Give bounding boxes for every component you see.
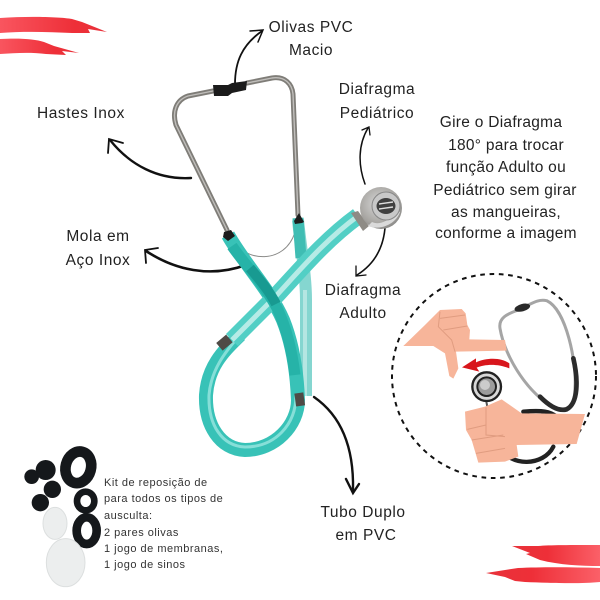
spring bbox=[233, 232, 295, 257]
label: Diafragma Adulto: Adulto bbox=[339, 305, 387, 322]
label: Olivas PVC Macio: Macio bbox=[289, 42, 333, 59]
olive yoke bbox=[213, 81, 247, 96]
clear membranes bbox=[43, 507, 85, 587]
arrow: Olivas bbox=[235, 30, 263, 84]
label: Gire o Diafragma instructions: conforme a imagem bbox=[435, 225, 577, 242]
arrow: Tubo Duplo bbox=[314, 397, 359, 493]
steel binaurals bbox=[174, 78, 298, 230]
label: Gire o Diafragma instructions: função Adulto ou bbox=[446, 159, 566, 176]
label: Tubo Duplo em PVC: em PVC bbox=[335, 527, 397, 544]
label: Mola em Aço Inox: Mola em bbox=[66, 228, 130, 245]
replacement kit photo bbox=[24, 449, 97, 587]
brush stroke: bottom right bbox=[486, 545, 600, 583]
chest piece bbox=[472, 372, 501, 407]
bottom hand bbox=[465, 399, 585, 463]
brush stroke: top left bbox=[0, 17, 107, 55]
label: Gire o Diafragma instructions: 180° para trocar bbox=[448, 137, 564, 154]
ear tube caps bbox=[223, 213, 304, 241]
label: Diafragma Pediátrico: Diafragma bbox=[339, 81, 415, 98]
label: Gire o Diafragma instructions: Pediátrico sem girar bbox=[433, 182, 577, 199]
chest piece bbox=[351, 187, 402, 231]
arrow: Hastes bbox=[108, 139, 191, 178]
kit text: 1 jogo de sinos bbox=[104, 559, 186, 571]
label: Diafragma Pediátrico: Pediátrico bbox=[340, 105, 414, 122]
tubing bbox=[206, 216, 358, 450]
dashed circle bbox=[392, 274, 596, 478]
arrow: Diafragma Adulto bbox=[356, 228, 385, 276]
label: Olivas PVC Macio: Olivas PVC bbox=[269, 19, 353, 36]
panel: rotation diagram bbox=[392, 274, 596, 478]
arrow: Mola bbox=[145, 248, 246, 271]
black olives bbox=[24, 460, 61, 511]
stethoscope bbox=[174, 78, 402, 450]
metal clips on tubes bbox=[216, 335, 305, 406]
label: Tubo Duplo em PVC: Tubo Duplo bbox=[320, 504, 406, 521]
top hand bbox=[403, 309, 507, 379]
label: Hastes Inox: Hastes Inox bbox=[37, 105, 125, 122]
label: Gire o Diafragma instructions: Gire o Diafragma bbox=[440, 114, 562, 131]
kit text: para todos os tipos de bbox=[104, 493, 223, 505]
arrow: Diafragma Pediatrico bbox=[360, 127, 370, 184]
kit text: Kit de reposição de bbox=[104, 477, 208, 489]
label: Mola em Aço Inox: Aço Inox bbox=[66, 252, 130, 269]
label: Gire o Diafragma instructions: as mangueiras, bbox=[451, 204, 561, 221]
red rotation arrow bbox=[462, 358, 509, 372]
black rings bbox=[62, 449, 97, 544]
mini stethoscope bbox=[500, 300, 577, 462]
kit text: ausculta: bbox=[104, 510, 153, 522]
kit text: 2 pares olivas bbox=[104, 527, 179, 539]
label: Diafragma Adulto: Diafragma bbox=[325, 282, 401, 299]
kit text: 1 jogo de membranas, bbox=[104, 543, 223, 555]
